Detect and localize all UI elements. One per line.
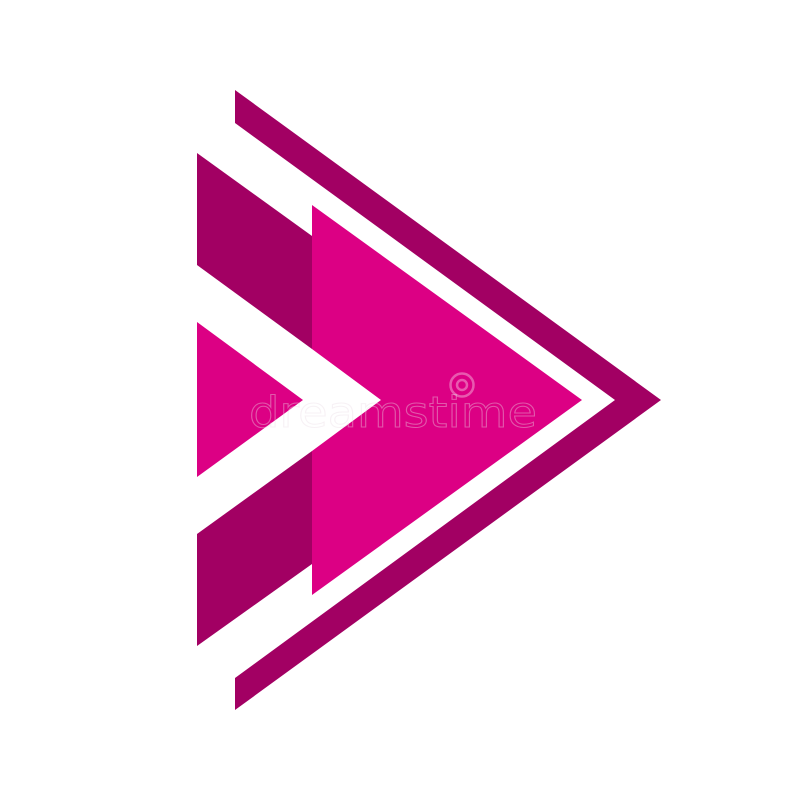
small bright triangle	[197, 322, 303, 477]
large bright notched arrowhead	[312, 205, 582, 595]
watermark: dreamstime	[249, 374, 537, 438]
outer chevron arrow	[235, 90, 661, 710]
dark middle chevron, lower band	[197, 451, 312, 646]
dark middle chevron, upper band	[197, 153, 312, 349]
watermark text: dreamstime	[249, 388, 537, 438]
watermark spiral icon	[450, 374, 474, 396]
